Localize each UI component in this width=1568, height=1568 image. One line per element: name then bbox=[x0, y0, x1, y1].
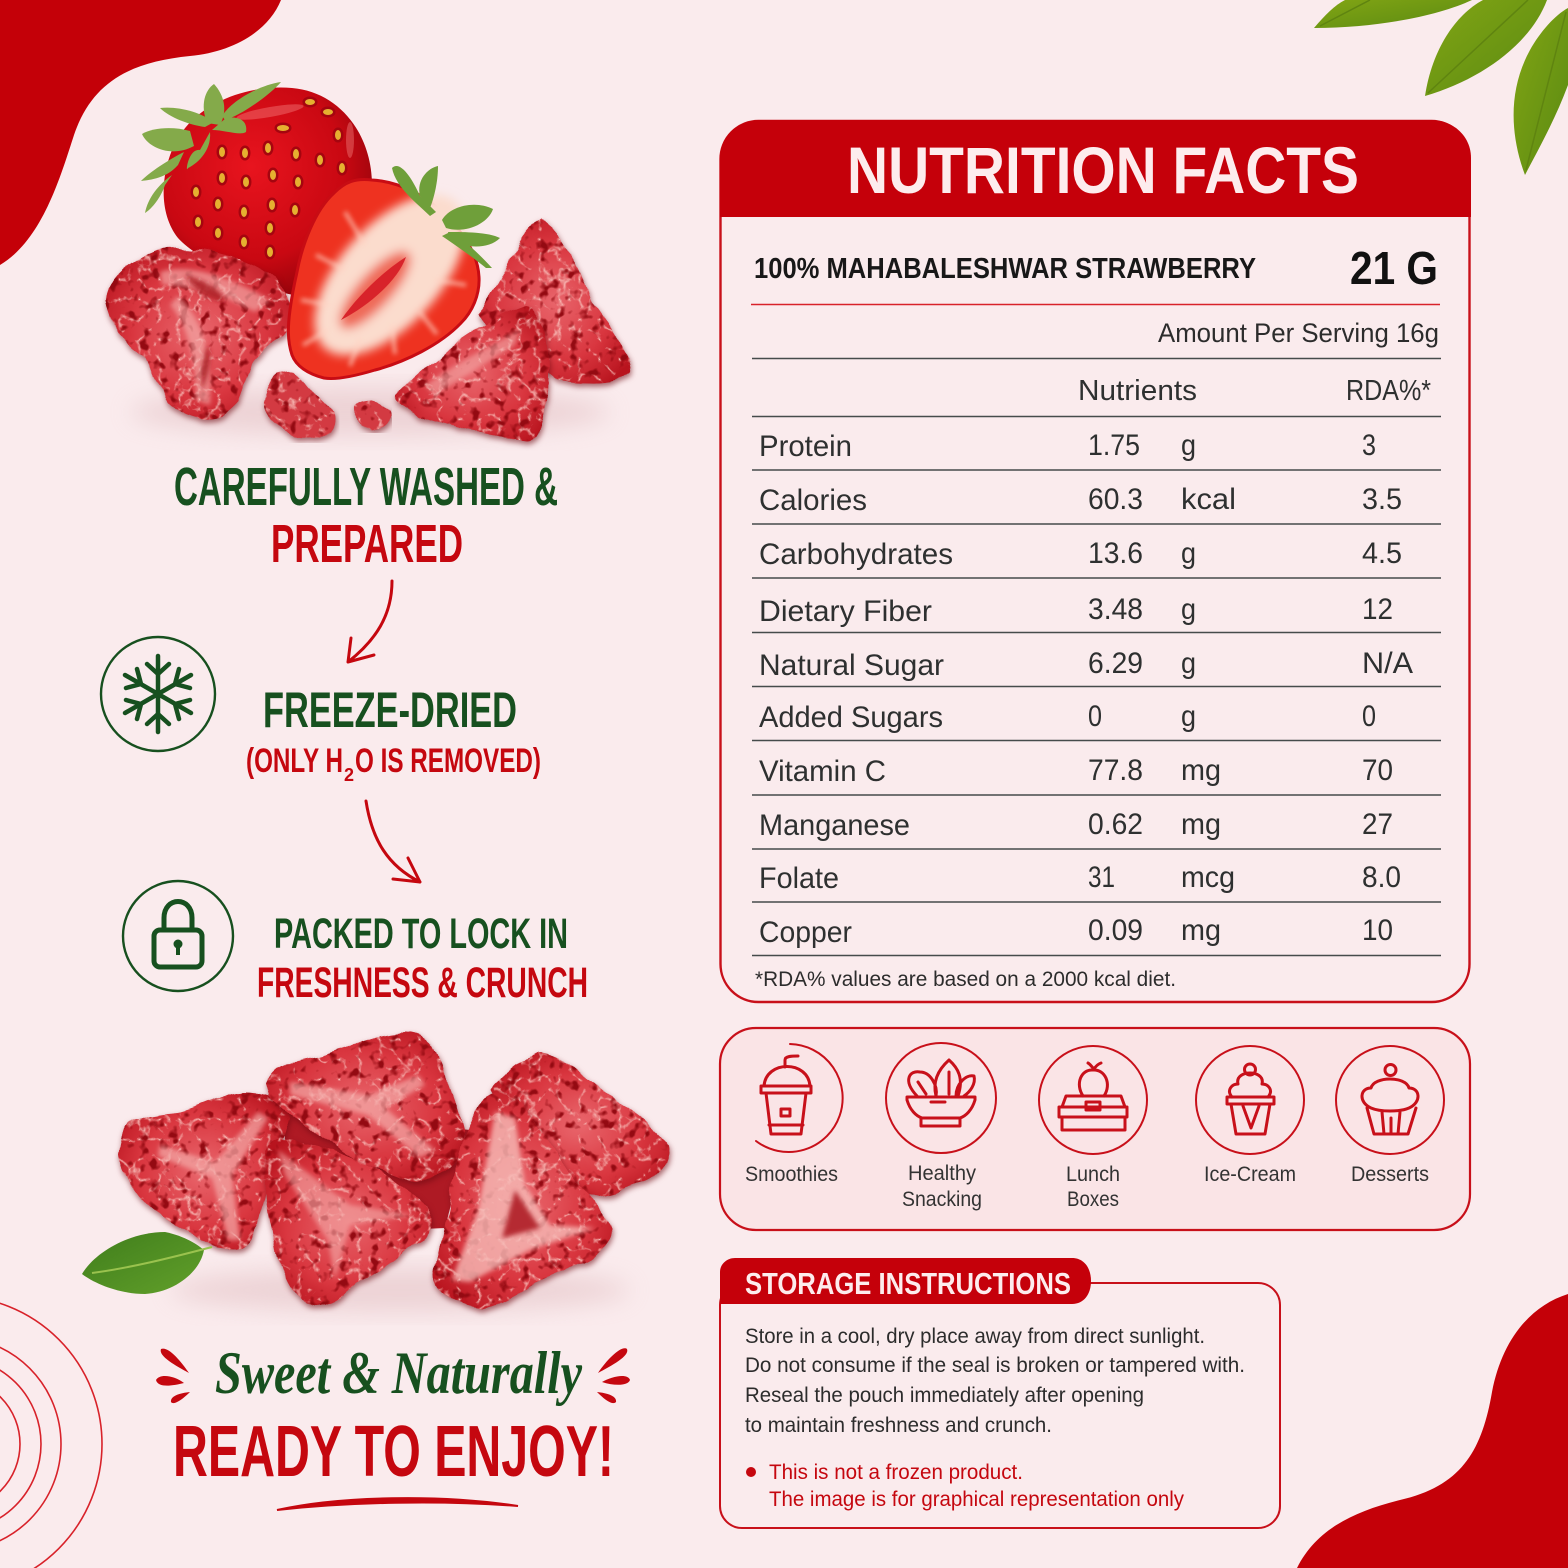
serving size: Amount Per Serving 16g bbox=[1158, 318, 1439, 348]
freeze-dried piece left bbox=[106, 248, 291, 419]
table rows: g bbox=[1181, 537, 1196, 570]
product line: 21 G bbox=[1350, 242, 1438, 294]
label lunch boxes: Lunch bbox=[1066, 1163, 1120, 1186]
table rows: 10 bbox=[1362, 914, 1393, 947]
arrow: freeze-dried to packed bbox=[366, 801, 420, 882]
icon: lunch box bbox=[1039, 1046, 1147, 1154]
nutrition title: NUTRITION FACTS bbox=[847, 133, 1359, 207]
storage disclaimer: This is not a frozen product. bbox=[769, 1461, 1023, 1484]
storage guidance text: Do not consume if the seal is broken or tampered with. bbox=[745, 1354, 1245, 1377]
sparkle accents bbox=[156, 1348, 630, 1403]
icon: salad bowl bbox=[886, 1043, 996, 1153]
table rows: 3 bbox=[1362, 429, 1376, 462]
freeze-dried piece right front bbox=[396, 306, 548, 440]
table rows: Calories bbox=[759, 484, 867, 517]
halved strawberry leaves bbox=[392, 166, 500, 268]
product line: 100% MAHABALESHWAR STRAWBERRY bbox=[754, 253, 1256, 285]
footnote: *RDA% values are based on a 2000 kcal diet. bbox=[755, 968, 1176, 991]
table rows: 4.5 bbox=[1362, 537, 1402, 570]
table rows: mg bbox=[1181, 914, 1221, 947]
heading: packed to lock in freshness bbox=[257, 910, 588, 1007]
crumb large bbox=[263, 371, 334, 437]
label healthy snacking bbox=[902, 1162, 982, 1211]
label ice-cream: Ice-Cream bbox=[1204, 1163, 1296, 1186]
dried piece middle bbox=[264, 1138, 432, 1305]
icon: smoothie bbox=[756, 1044, 843, 1152]
table rows: 60.3 bbox=[1088, 483, 1143, 516]
strawberry calyx leaves bbox=[141, 82, 281, 213]
storage guidance text: Reseal the pouch immediately after opening bbox=[745, 1384, 1144, 1407]
table rows: kcal bbox=[1181, 483, 1236, 516]
storage heading pill bbox=[720, 1258, 1091, 1304]
decorative concentric rings bottom left bbox=[0, 1296, 102, 1568]
arrow: washed to freeze-dried bbox=[348, 581, 392, 662]
table rows: 6.29 bbox=[1088, 647, 1143, 680]
note: only water removed bbox=[246, 742, 541, 785]
note: only water removed: 2 bbox=[344, 765, 354, 785]
storage disclaimer bbox=[746, 1461, 1184, 1511]
table rows: mg bbox=[1181, 808, 1221, 841]
table rows: 3.48 bbox=[1088, 593, 1143, 626]
storage guidance text bbox=[745, 1325, 1245, 1437]
note: only water removed: O IS REMOVED) bbox=[355, 742, 541, 780]
icon: cupcake bbox=[1336, 1046, 1444, 1154]
heading: freeze-dried: FREEZE-DRIED bbox=[263, 682, 517, 738]
label smoothies: Smoothies bbox=[745, 1163, 838, 1186]
storage heading pill: STORAGE INSTRUCTIONS bbox=[745, 1266, 1071, 1301]
heading: carefully washed and prepared bbox=[174, 457, 558, 574]
label healthy snacking: Healthy bbox=[908, 1162, 976, 1185]
table rows: 3.5 bbox=[1362, 483, 1402, 516]
heading: carefully washed and prepared: CAREFULLY WASHED & bbox=[174, 457, 558, 517]
illustration: freeze-dried strawberry pile bbox=[82, 1032, 669, 1312]
table rows: g bbox=[1181, 593, 1196, 626]
table rows: 0.62 bbox=[1088, 808, 1143, 841]
heading: packed to lock in freshness: FRESHNESS & CRUNCH bbox=[257, 959, 588, 1007]
table rows: 13.6 bbox=[1088, 537, 1143, 570]
storage guidance text: Store in a cool, dry place away from direct sunlight. bbox=[745, 1325, 1205, 1348]
table rows: mcg bbox=[1181, 861, 1235, 894]
dried piece top bbox=[267, 1032, 463, 1180]
table rows: Dietary Fiber bbox=[759, 595, 932, 628]
crumb small bbox=[353, 401, 389, 430]
table rows: mg bbox=[1181, 754, 1221, 787]
table rows: g bbox=[1181, 647, 1196, 680]
dried piece front right bbox=[434, 1092, 612, 1308]
table rows: Added Sugars bbox=[759, 701, 943, 734]
storage guidance text: to maintain freshness and crunch. bbox=[745, 1414, 1052, 1437]
note: only water removed: (ONLY H bbox=[246, 742, 343, 780]
table header: Nutrients bbox=[1078, 375, 1197, 407]
nutrition header band bbox=[720, 120, 1471, 217]
icon: snowflake bbox=[101, 637, 215, 751]
tagline: sweet and naturally: Sweet & Naturally bbox=[215, 1340, 582, 1406]
label desserts: Desserts bbox=[1351, 1163, 1429, 1186]
table rows: 0 bbox=[1362, 700, 1376, 733]
table rows: 27 bbox=[1362, 808, 1393, 841]
underline swoosh bbox=[277, 1498, 518, 1510]
panel: nutrition facts bbox=[720, 120, 1471, 1002]
panel: ways to enjoy bbox=[720, 1028, 1470, 1230]
table rows: Copper bbox=[759, 916, 852, 949]
freeze-dried piece right back bbox=[478, 221, 630, 383]
label lunch boxes: Boxes bbox=[1067, 1188, 1119, 1211]
table header bbox=[1078, 375, 1431, 407]
table rows: g bbox=[1181, 700, 1196, 733]
table rows: 12 bbox=[1362, 593, 1393, 626]
heading: carefully washed and prepared: PREPARED bbox=[271, 514, 463, 574]
decorative leaves top right bbox=[1314, 0, 1568, 175]
table header: RDA%* bbox=[1346, 375, 1431, 407]
table rows: 8.0 bbox=[1362, 861, 1401, 894]
label lunch boxes bbox=[1066, 1163, 1120, 1211]
table rows: 0 bbox=[1088, 700, 1102, 733]
tagline: ready to enjoy: READY TO ENJOY! bbox=[173, 1412, 614, 1492]
decorative bottom-right red blob bbox=[1297, 1294, 1568, 1568]
label healthy snacking: Snacking bbox=[902, 1188, 982, 1211]
halved strawberry bbox=[287, 169, 493, 381]
table rows bbox=[752, 358, 1441, 956]
decorative top-left red blob bbox=[0, 0, 281, 265]
table rows: Protein bbox=[759, 430, 852, 463]
dried piece left bbox=[118, 1092, 288, 1250]
panel: storage instructions bbox=[720, 1258, 1280, 1528]
product line bbox=[751, 242, 1440, 304]
table rows: 31 bbox=[1088, 861, 1115, 894]
table rows: N/A bbox=[1362, 647, 1413, 680]
dark backing between pieces bbox=[285, 1110, 470, 1230]
table rows: 77.8 bbox=[1088, 754, 1143, 787]
table rows: Vitamin C bbox=[759, 755, 886, 788]
storage disclaimer: The image is for graphical representation only bbox=[769, 1488, 1184, 1511]
illustration: fresh and freeze-dried strawberries bbox=[106, 82, 630, 440]
table rows: Carbohydrates bbox=[759, 538, 953, 571]
table rows: Manganese bbox=[759, 809, 910, 842]
whole strawberry bbox=[164, 88, 372, 296]
table rows: g bbox=[1181, 429, 1196, 462]
heading: packed to lock in freshness: PACKED TO LOCK IN bbox=[274, 910, 568, 958]
icon: ice cream bbox=[1196, 1046, 1304, 1154]
table rows: 0.09 bbox=[1088, 914, 1143, 947]
dried piece back right bbox=[491, 1053, 669, 1197]
table rows: Folate bbox=[759, 862, 839, 895]
table rows: 70 bbox=[1362, 754, 1393, 787]
basil leaf bbox=[82, 1232, 212, 1294]
table rows: 1.75 bbox=[1088, 429, 1140, 462]
icon: padlock bbox=[123, 881, 233, 991]
table rows: Natural Sugar bbox=[759, 649, 944, 682]
